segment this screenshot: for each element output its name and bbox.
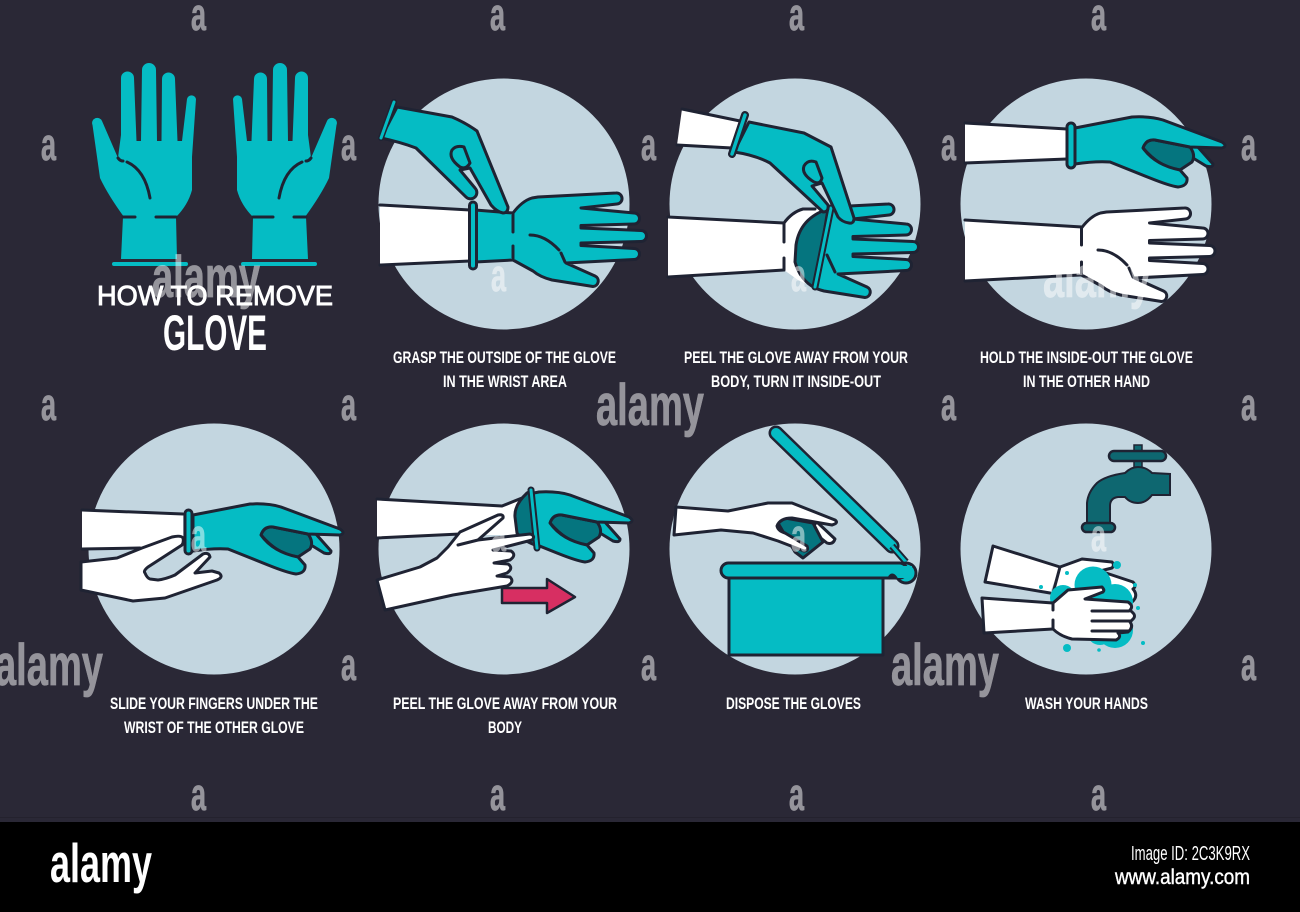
watermark grid: a bbox=[341, 379, 357, 430]
watermark grid: alamy bbox=[1043, 245, 1151, 310]
watermark grid: a bbox=[1241, 119, 1257, 170]
watermark grid: a bbox=[41, 119, 57, 170]
soap foam bbox=[1050, 566, 1133, 648]
watermark grid: a bbox=[341, 119, 357, 170]
title: HOW TO REMOVE bbox=[97, 280, 333, 311]
caption: step 4: WRIST OF THE OTHER GLOVE bbox=[124, 719, 304, 737]
watermark grid: a bbox=[789, 769, 805, 820]
caption: step 6: DISPOSE THE GLOVES bbox=[726, 695, 861, 713]
footer band: www.alamy.com bbox=[1114, 866, 1250, 889]
watermark grid: a bbox=[791, 510, 807, 561]
panel: step 3 hold bbox=[960, 78, 1225, 330]
caption: step 4 bbox=[110, 695, 318, 737]
caption: step 3 bbox=[980, 349, 1193, 391]
icon: pair of gloves bbox=[92, 63, 337, 264]
caption: step 2: BODY, TURN IT INSIDE-OUT bbox=[711, 373, 881, 391]
caption: step 5: BODY bbox=[488, 719, 522, 737]
title: GLOVE bbox=[163, 305, 267, 361]
watermark grid: a bbox=[191, 510, 207, 561]
caption: step 5: PEEL THE GLOVE AWAY FROM YOUR bbox=[393, 695, 617, 713]
watermark grid: a bbox=[1091, 510, 1107, 561]
panel: step 7 wash bbox=[960, 424, 1212, 674]
watermark grid: a bbox=[1091, 769, 1107, 820]
watermark grid: a bbox=[941, 119, 957, 170]
caption: step 1: IN THE WRIST AREA bbox=[443, 373, 567, 391]
caption: step 1: GRASP THE OUTSIDE OF THE GLOVE bbox=[393, 349, 616, 367]
caption: step 5 bbox=[393, 695, 617, 737]
caption: step 3: HOLD THE INSIDE-OUT THE GLOVE bbox=[980, 349, 1193, 367]
watermark grid: a bbox=[341, 639, 357, 690]
panel: step 4 slide bbox=[81, 424, 343, 674]
watermark grid: a bbox=[41, 379, 57, 430]
caption: step 7: WASH YOUR HANDS bbox=[1025, 695, 1148, 713]
watermark grid: a bbox=[641, 119, 657, 170]
panel: step 6 dispose bbox=[670, 424, 920, 674]
title bbox=[97, 280, 333, 361]
footer band: alamy bbox=[50, 832, 152, 894]
watermark grid: a bbox=[941, 379, 957, 430]
watermark grid: a bbox=[491, 250, 507, 301]
watermark grid: a bbox=[490, 769, 506, 820]
watermark grid: a bbox=[1241, 379, 1257, 430]
watermark grid: alamy bbox=[891, 633, 999, 698]
watermark grid: a bbox=[491, 510, 507, 561]
caption: step 2 bbox=[684, 349, 908, 391]
watermark grid: alamy bbox=[152, 245, 260, 310]
panel: step 1 grasp bbox=[378, 78, 646, 330]
icon: water tap bbox=[1082, 445, 1170, 532]
panel: step 2 peel bbox=[668, 78, 920, 330]
watermark grid: a bbox=[641, 639, 657, 690]
caption: step 1 bbox=[393, 349, 616, 391]
watermark grid: a bbox=[191, 769, 207, 820]
watermark grid: a bbox=[791, 250, 807, 301]
watermark grid: a bbox=[1241, 639, 1257, 690]
caption: step 4: SLIDE YOUR FINGERS UNDER THE bbox=[110, 695, 318, 713]
footer band bbox=[0, 817, 1300, 912]
arrow bbox=[502, 579, 575, 613]
caption: step 3: IN THE OTHER HAND bbox=[1023, 373, 1150, 391]
soap droplets bbox=[1039, 561, 1145, 652]
caption: step 2: PEEL THE GLOVE AWAY FROM YOUR bbox=[684, 349, 908, 367]
watermark grid: alamy bbox=[596, 373, 704, 438]
panel: step 5 peel bbox=[377, 424, 632, 674]
